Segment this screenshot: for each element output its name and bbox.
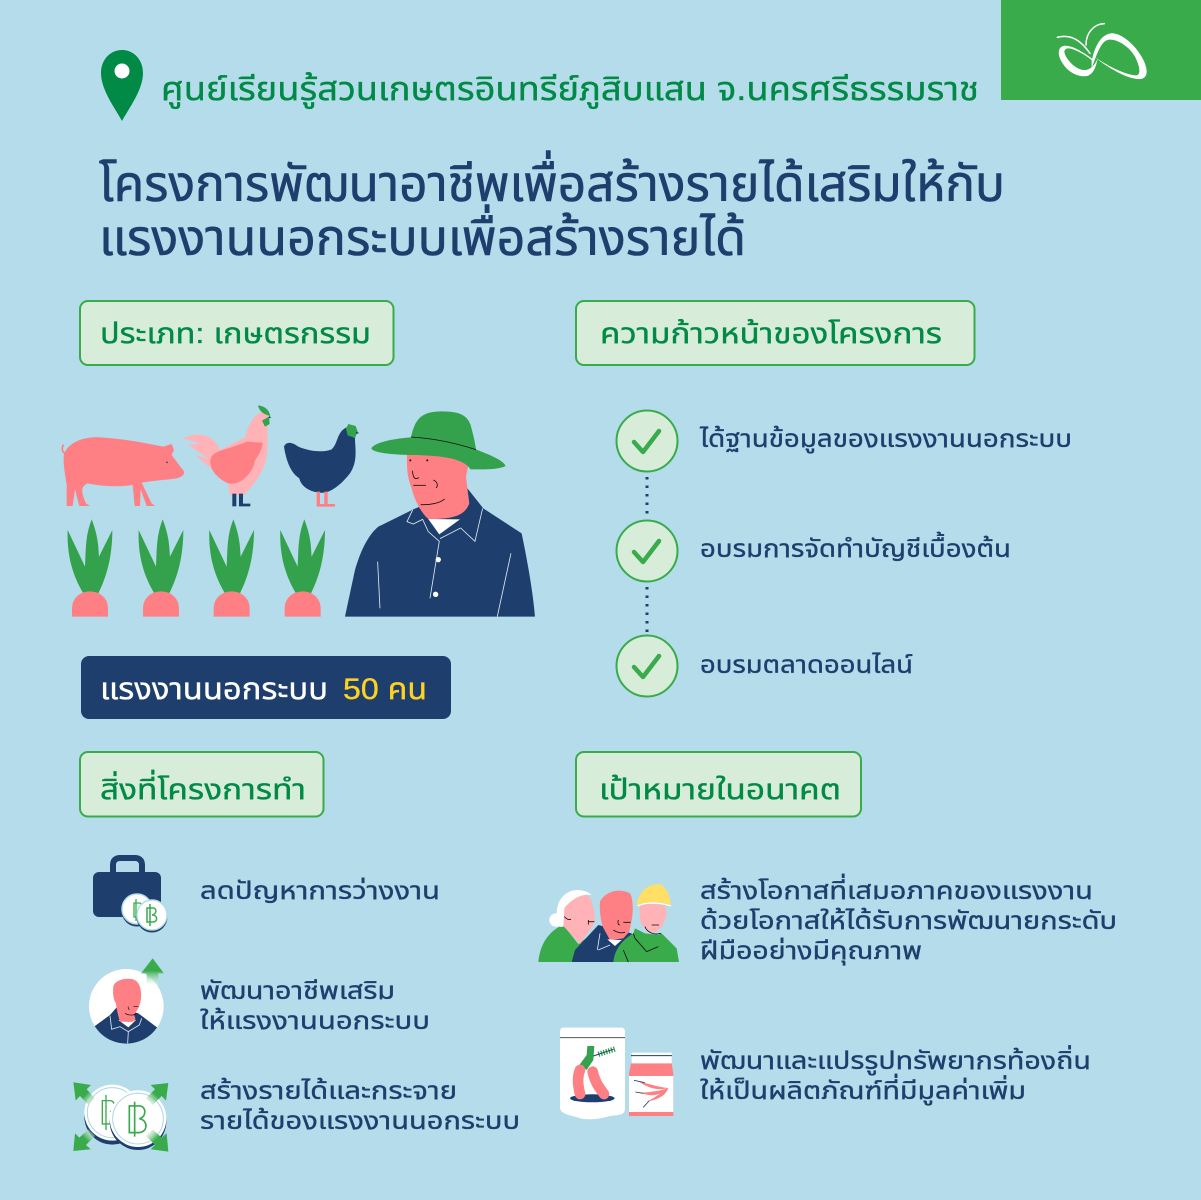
location heading: ศูนย์เรียนรู้สวนเกษตรอินทรีย์ภูสิบแสน จ.นครศรีธรรมราช — [161, 70, 979, 109]
text: equal opportunity goal: ด้วยโอกาสให้ได้รับการพัฒนายกระดับ — [700, 907, 1117, 935]
icon: coins with spreading arrows — [73, 1082, 168, 1152]
text: equal opportunity goal: ฝีมืออย่างมีคุณภาพ — [700, 937, 922, 966]
check item 3 — [616, 636, 913, 696]
text: create and distribute income — [200, 1077, 520, 1135]
check item 1 — [616, 410, 1072, 472]
heading box: type: ประเภท: เกษตรกรรม — [100, 318, 371, 350]
icon: briefcase with coins — [93, 858, 168, 932]
progress checklist — [616, 410, 1072, 696]
callout: 50 informal workers — [81, 656, 451, 719]
heading box: progress — [576, 301, 974, 365]
text: value-added products goal — [700, 1044, 1091, 1106]
title: แรงงานนอกระบบเพื่อสร้างรายได้ — [99, 204, 746, 266]
heading box: progress: ความก้าวหน้าของโครงการ — [600, 318, 942, 350]
text: value-added products goal: ให้เป็นผลิตภัณฑ์ที่มีมูลค่าเพิ่ม — [700, 1073, 1026, 1106]
icon: hen — [284, 424, 359, 507]
text: develop supplementary careers: พัฒนาอาชีพเสริม — [200, 977, 395, 1005]
check item 3: อบรมตลาดออนไลน์ — [700, 651, 913, 679]
check item 1: ได้ฐานข้อมูลของแรงงานนอกระบบ — [699, 425, 1072, 454]
text: equal opportunity goal — [700, 873, 1117, 966]
text: develop supplementary careers — [200, 977, 430, 1035]
heading box: what the project does — [80, 752, 324, 816]
illustration: farm animals, plants and farmer — [62, 405, 535, 617]
heading box: future goals: เป้าหมายในอนาคต — [599, 774, 841, 806]
heading box: type — [80, 301, 394, 365]
text: reduce unemployment: ลดปัญหาการว่างงาน — [200, 877, 440, 905]
text: develop supplementary careers: ให้แรงงานนอกระบบ — [200, 1007, 430, 1035]
icon: pig — [62, 437, 184, 506]
logo panel: green butterfly — [1001, 0, 1201, 100]
text: equal opportunity goal: สร้างโอกาสที่เสมอภาคของแรงงาน — [700, 873, 1093, 905]
check item 2 — [616, 520, 1011, 582]
icon: packaged products — [560, 1028, 673, 1119]
icon: person with up arrow — [89, 958, 164, 1047]
icon: group of workers — [538, 884, 679, 962]
heading box: future goals — [576, 752, 861, 816]
check item 2: อบรมการจัดทำบัญชีเบื้องต้น — [700, 531, 1011, 563]
text: create and distribute income: สร้างรายได้และกระจาย — [200, 1077, 457, 1105]
callout: 50 informal workers: แรงงานนอกระบบ — [100, 673, 328, 706]
title: โครงการพัฒนาอาชีพเพื่อสร้างรายได้เสริมให้กับ — [99, 150, 1005, 212]
title — [99, 150, 1005, 266]
heading box: what the project does: สิ่งที่โครงการทำ — [100, 769, 306, 806]
icon: rooster — [183, 405, 271, 506]
icon: farmer — [345, 411, 535, 617]
icon: plants — [68, 519, 112, 617]
callout: 50 informal workers: 50 คน — [343, 673, 427, 706]
text: value-added products goal: พัฒนาและแปรรูปทรัพยากรท้องถิ่น — [700, 1044, 1091, 1076]
text: create and distribute income: รายได้ของแรงงานนอกระบบ — [200, 1107, 520, 1135]
icon: location pin — [101, 50, 143, 121]
